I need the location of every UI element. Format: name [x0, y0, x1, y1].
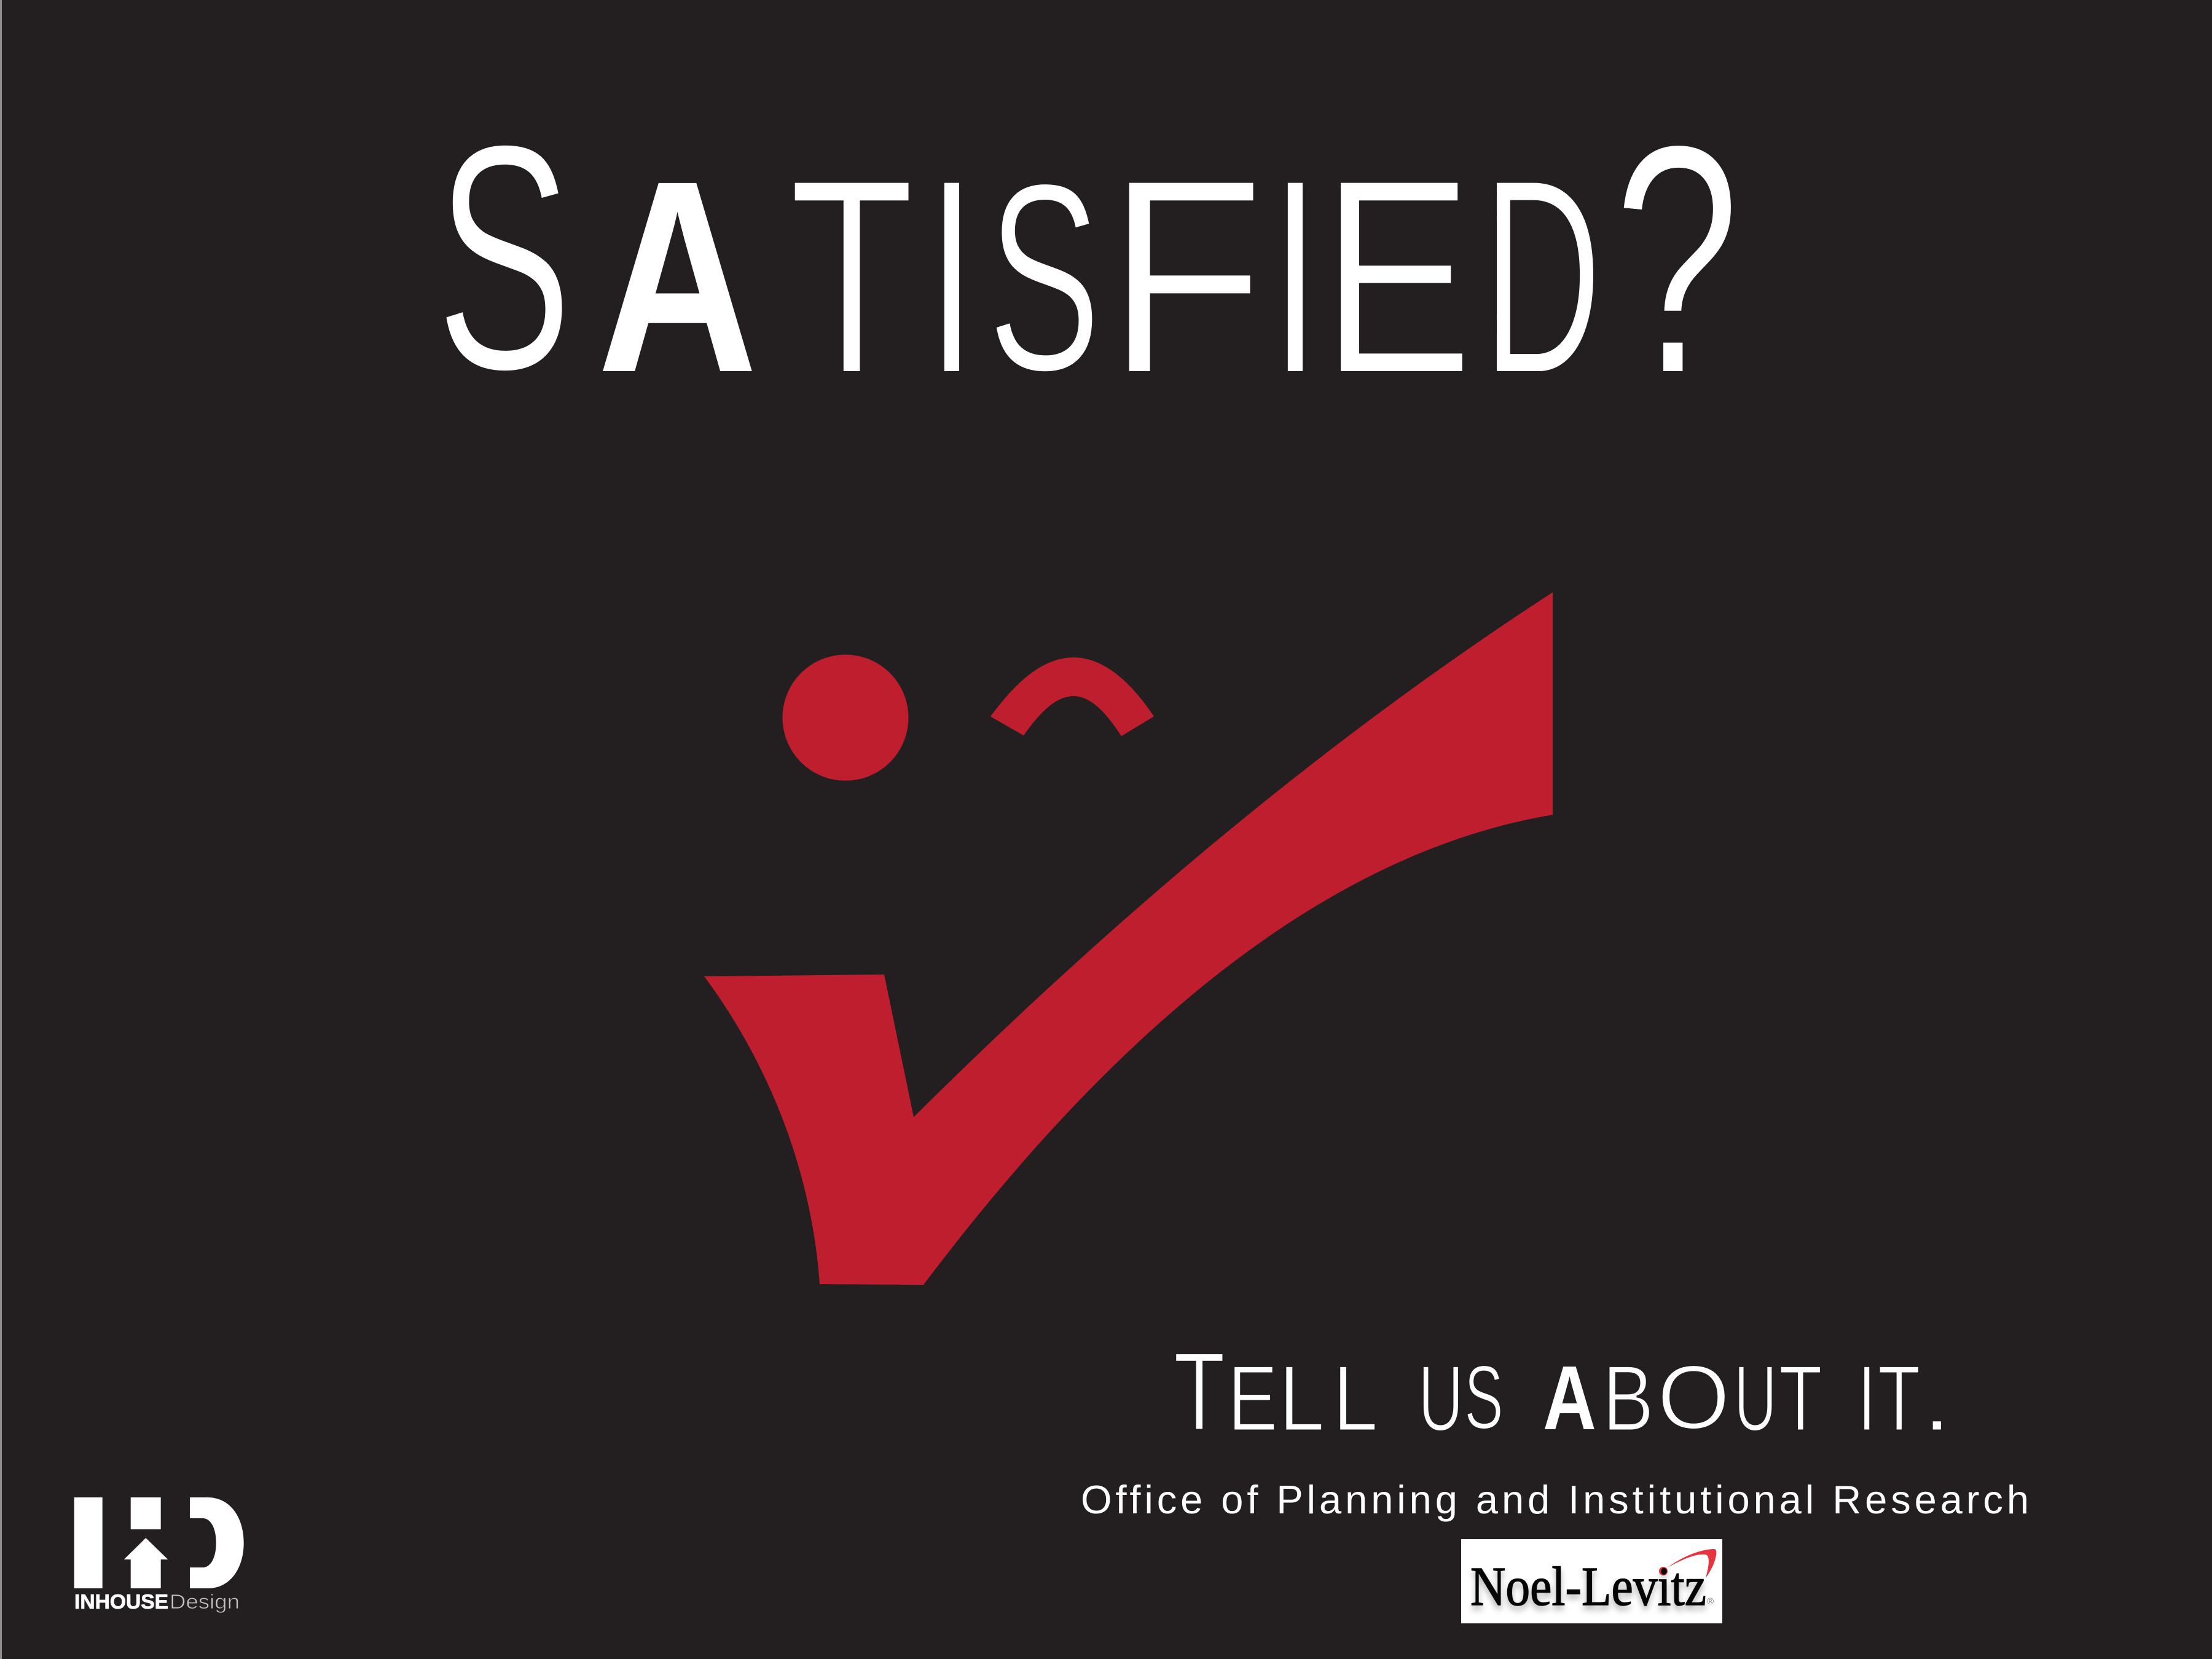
logo mark: I bar: [74, 1497, 103, 1588]
tagline: S: [1464, 1347, 1504, 1448]
title: [436, 77, 1741, 443]
logo mark: house arrow: [124, 1538, 168, 1588]
logo name: Noel-Levitz: [1470, 1556, 1706, 1617]
tagline: L: [1333, 1346, 1378, 1451]
title: T: [789, 121, 914, 433]
text: office name: Office of Planning and Institutional Research: [1081, 1477, 2029, 1522]
title: D: [1482, 121, 1602, 433]
icon: smiley check mark face: [704, 592, 1553, 1285]
tagline: U: [1734, 1346, 1776, 1451]
tagline: T: [1174, 1330, 1225, 1454]
tagline: B: [1602, 1346, 1654, 1451]
title: F: [1106, 121, 1265, 433]
logo dot: [1659, 1567, 1668, 1575]
logo registered mark: ®: [1707, 1596, 1714, 1607]
logo background: [1461, 1539, 1722, 1623]
icon: round eye: [783, 655, 908, 780]
title: E: [1320, 121, 1473, 433]
icon: check mark smile: [704, 592, 1553, 1285]
title: I: [926, 121, 978, 433]
tagline: A: [1543, 1347, 1596, 1449]
tagline: I: [1857, 1346, 1876, 1451]
tagline: E: [1228, 1346, 1277, 1451]
tagline: O: [1657, 1347, 1730, 1448]
logo mark: D: [190, 1497, 244, 1588]
tagline: [1174, 1330, 1952, 1454]
logo mark: square: [131, 1497, 161, 1529]
icon: Noel-Levitz logo: [1461, 1539, 1722, 1623]
title: S: [987, 127, 1101, 428]
logo swoosh: [1668, 1549, 1716, 1578]
icon: winking eye arc: [990, 657, 1154, 736]
tagline: T: [1878, 1346, 1921, 1451]
tagline: T: [1779, 1346, 1822, 1451]
title: ?: [1613, 77, 1741, 443]
tagline: U: [1418, 1346, 1464, 1451]
tagline: .: [1922, 1346, 1952, 1451]
title: I: [1269, 121, 1321, 433]
title: S: [436, 77, 573, 438]
logo wordmark: Design: [170, 1590, 240, 1613]
logo wordmark: INHOUSE: [74, 1590, 168, 1613]
tagline: L: [1279, 1346, 1325, 1451]
icon: InHouse Design logo: [74, 1497, 244, 1613]
title: A: [597, 124, 758, 429]
